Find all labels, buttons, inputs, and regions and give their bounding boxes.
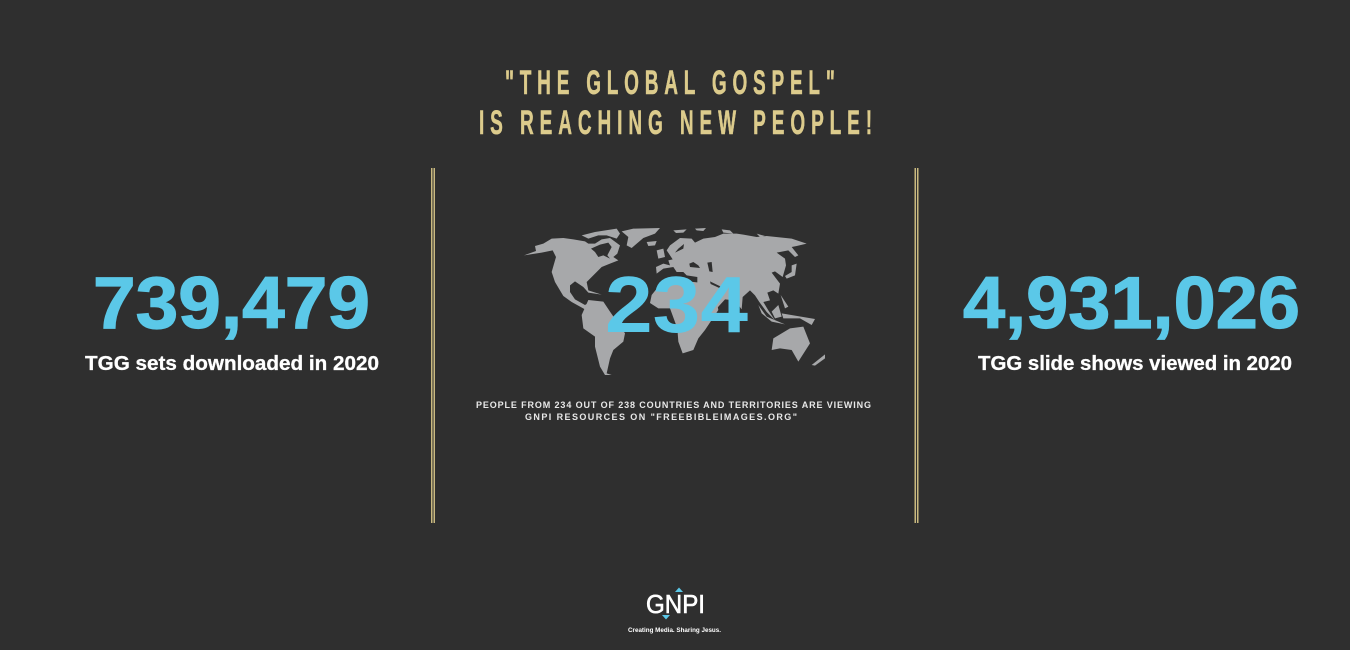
- caption: PEOPLE FROM 234 OUT OF 238 COUNTRIES AND TERRITORIES ARE VIEWING: [476, 400, 871, 410]
- icon: up triangle: [675, 588, 683, 592]
- tagline: Creating Media. Sharing Jesus.: [628, 627, 721, 634]
- stat: sets downloaded: [85, 263, 379, 375]
- stat: slide shows viewed: TGG slide shows viewed in 2020: [978, 353, 1292, 375]
- stat: 234 countries: 234: [605, 260, 749, 349]
- caption: GNPI RESOURCES ON "FREEBIBLEIMAGES.ORG": [525, 412, 797, 422]
- caption: [476, 400, 871, 422]
- title: [479, 63, 872, 141]
- title: IS REACHING NEW PEOPLE!: [479, 103, 872, 141]
- icon: down triangle: [662, 615, 670, 620]
- stat: sets downloaded: TGG sets downloaded in 2020: [85, 353, 379, 375]
- stat: slide shows viewed: 4,931,026: [963, 263, 1300, 344]
- stat: sets downloaded: 739,479: [93, 263, 370, 344]
- icon: world map: [524, 228, 825, 375]
- title: "THE GLOBAL GOSPEL": [505, 63, 835, 101]
- stat: slide shows viewed: [963, 263, 1300, 375]
- logo: GNPI: [628, 588, 721, 634]
- logo: GNPI: GNPI: [646, 589, 705, 619]
- eurasia: [656, 228, 807, 320]
- north america and greenland: [524, 228, 660, 309]
- left divider: [431, 168, 435, 523]
- stat: 234 countries: [476, 260, 871, 422]
- right divider: [914, 168, 918, 523]
- southern continents and islands: [582, 282, 825, 375]
